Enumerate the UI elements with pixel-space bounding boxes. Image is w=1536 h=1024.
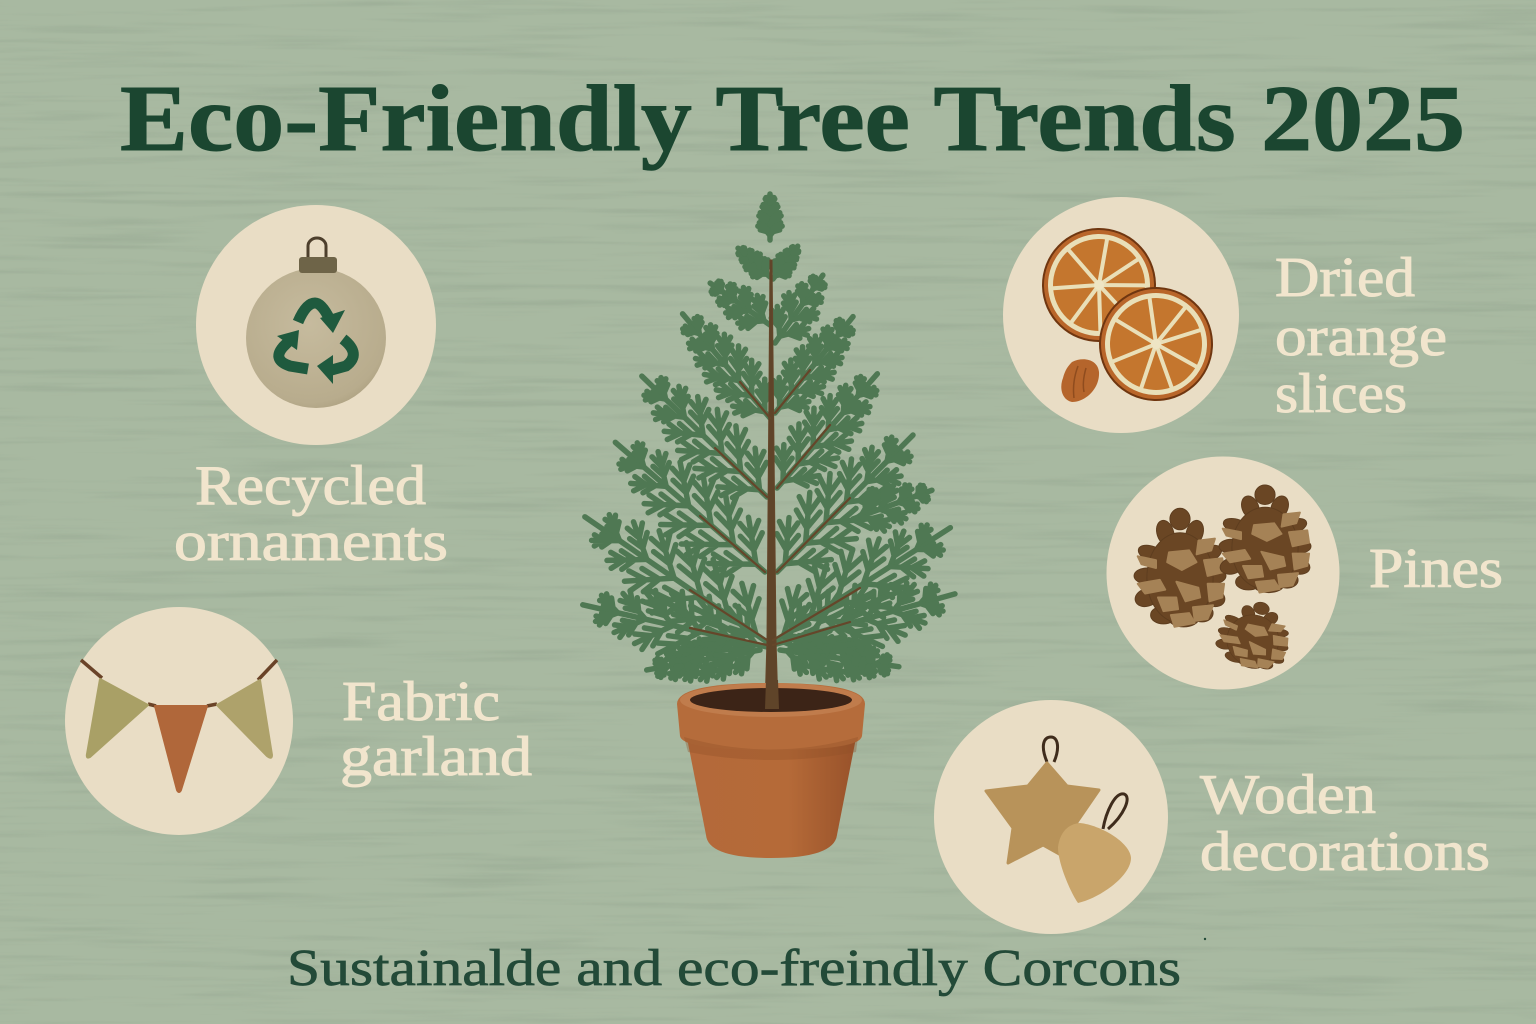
icon: wooden star and heart	[986, 737, 1131, 903]
icon: recycled ornament bauble	[246, 238, 386, 408]
label: recycled ornaments: Recycled	[195, 455, 426, 517]
illustration: potted tree	[558, 194, 975, 858]
circle: pines	[1106, 456, 1340, 690]
circle: dried orange slices	[1003, 197, 1239, 433]
label: dried orange slices: Dried	[1275, 247, 1415, 309]
label: dried orange slices	[1275, 247, 1447, 425]
tree foliage	[558, 194, 975, 695]
panel: pines	[1106, 456, 1503, 690]
label: fabric garland	[340, 671, 532, 788]
title: Eco-Friendly Tree Trends 2025	[120, 67, 1465, 171]
label: dried orange slices: slices	[1275, 363, 1407, 425]
panel: wooden decorations	[934, 700, 1490, 934]
panel: recycled ornaments	[174, 205, 448, 573]
tree trunk and branches	[690, 260, 860, 708]
panel: fabric garland	[65, 607, 532, 835]
icon: dried orange slices	[1033, 219, 1220, 408]
footer caption: Sustainalde and eco-freindly Corcons	[287, 940, 1181, 997]
terracotta pot	[677, 680, 865, 858]
label: wooden decorations	[1200, 764, 1490, 883]
label: fabric garland: Fabric	[342, 671, 500, 733]
label: fabric garland: garland	[340, 726, 532, 788]
label: wooden decorations: decorations	[1200, 821, 1490, 883]
circle: recycled ornaments	[196, 205, 436, 445]
circle: fabric garland	[65, 607, 293, 835]
icon: fabric garland bunting	[81, 660, 277, 792]
icon: pine cones	[1133, 485, 1312, 676]
panel: dried orange slices	[1003, 197, 1447, 433]
label: dried orange slices: orange	[1275, 306, 1447, 368]
label: recycled ornaments	[174, 455, 448, 573]
label: wooden decorations: Woden	[1200, 764, 1376, 826]
label: recycled ornaments: ornaments	[174, 511, 448, 573]
label: pines: Pines	[1369, 538, 1503, 600]
circle: wooden decorations	[934, 700, 1168, 934]
